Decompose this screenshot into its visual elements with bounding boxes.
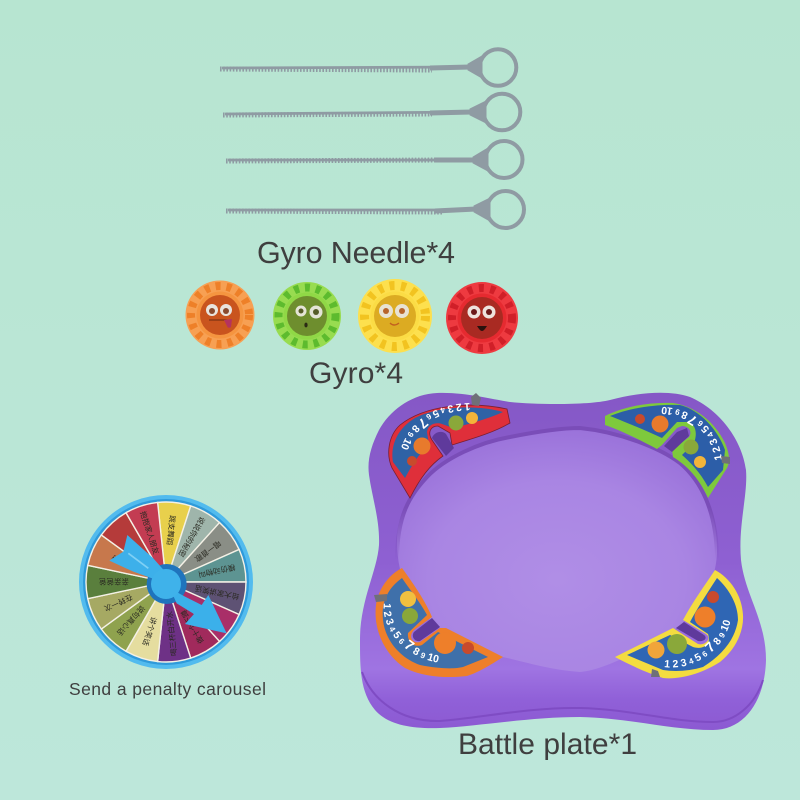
score track: top-right green: 1 2 3 4 5 6 7 8 9 10: [662, 406, 722, 460]
icon: carousel arrow: [109, 535, 227, 633]
plate bottom lip line: [362, 672, 763, 722]
score track: top-left red: 1 2 3 4 5 6 7 8 9 10: [402, 403, 470, 450]
caption: carousel: Send a penalty carousel: [69, 679, 266, 699]
gyro: yellow: [358, 279, 432, 353]
score track: bottom-left orange: 1 2 3 4 5 6 7 8 9 10: [384, 604, 439, 662]
gyros: [186, 279, 518, 354]
carousel penalty texts: 唱一首歌: [193, 539, 223, 565]
carousel penalty texts: 亲亲爸爸: [99, 577, 129, 587]
plate bowl: [397, 428, 717, 672]
carousel penalty texts: 模仿动物叫: [197, 562, 236, 580]
heading: gyro needle: Gyro Needle*4: [257, 236, 455, 270]
gyro: orange: [186, 280, 254, 350]
number track paths: [384, 403, 732, 668]
needle 3: [226, 141, 522, 178]
carousel outer ring: [81, 497, 251, 667]
heading: gyro: Gyro*4: [309, 357, 403, 390]
score track: top-right green: [605, 402, 729, 498]
battle plate: [360, 392, 766, 730]
carousel penalty texts: 说句真心话: [115, 603, 147, 638]
needle 2: [223, 94, 520, 130]
carousel penalty texts: [99, 510, 240, 657]
carousel penalty texts: 跳支舞蹈: [165, 515, 178, 546]
carousel penalty texts: 讲个笑话: [140, 616, 159, 648]
carousel penalty texts: 背诗: [109, 553, 127, 568]
carousel penalty texts: 给大家讲笑话: [193, 583, 240, 602]
plate bowl upper rim: [397, 428, 717, 560]
carousel penalty texts: 说说你的秘密: [176, 515, 208, 559]
gyro: red: [446, 282, 518, 354]
penalty carousel: [81, 497, 251, 667]
carousel penalty texts: 在转一次: [102, 592, 134, 614]
needle 1: [220, 49, 516, 86]
score track: bottom-left orange: [376, 568, 503, 677]
carousel penalty texts: 做十个下蹲: [178, 608, 206, 646]
heading: battle plate: Battle plate*1: [458, 728, 637, 761]
carousel wedges: [86, 501, 248, 663]
needle 4: [226, 191, 524, 228]
score track: top-left red: [388, 403, 510, 499]
metal pegs: [374, 393, 730, 677]
carousel penalty texts: 抱抱家人朋友: [138, 510, 162, 556]
gyro needles: [220, 49, 524, 228]
score track: bottom-right yellow: 1 2 3 4 5 6 7 8 9 10: [664, 620, 730, 668]
gyro: green: [273, 282, 341, 350]
plate outer body: [360, 393, 766, 730]
carousel penalty texts: 喝三杯白开水: [164, 610, 179, 657]
score track: bottom-right yellow: [615, 570, 744, 678]
